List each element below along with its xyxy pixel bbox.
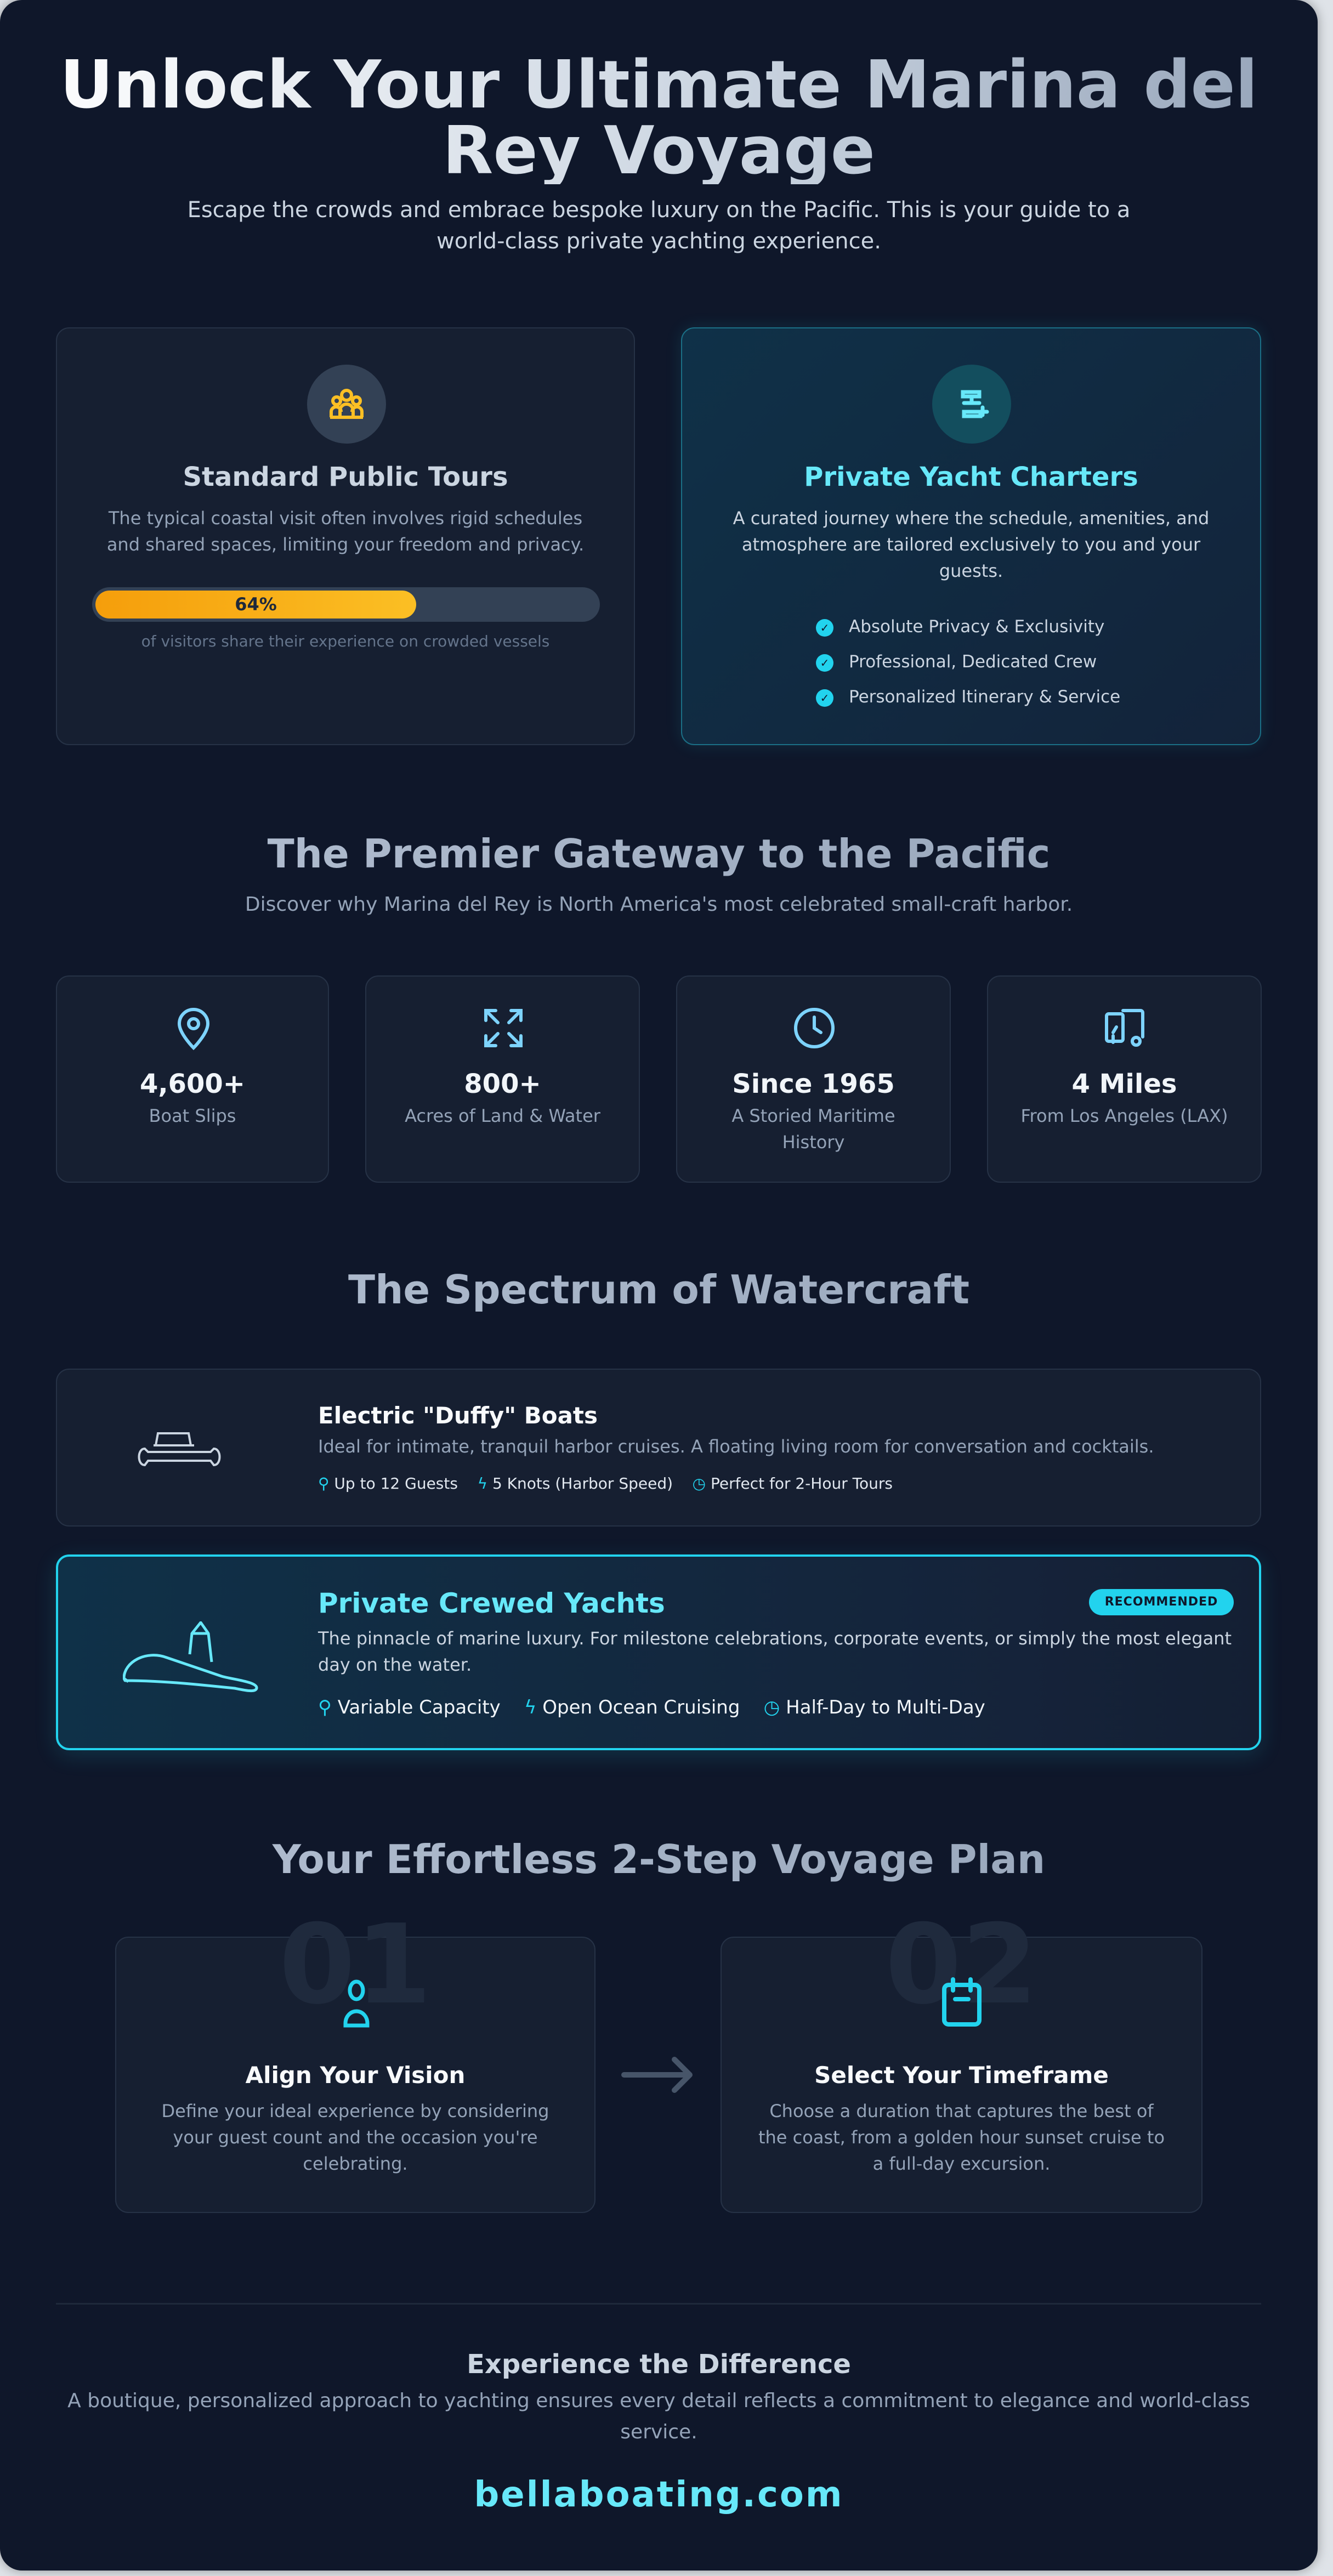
checklist: ✓ xyxy=(820,621,829,634)
title: Private Crewed Yachts xyxy=(318,1587,665,1619)
subheading: Discover why Marina del Rey is North America's most celebrated small-craft harbor. xyxy=(245,893,1073,916)
title: Align Your Vision xyxy=(246,2062,465,2089)
panel: private yacht charters xyxy=(681,327,1261,745)
big number: 01 xyxy=(279,1901,432,2029)
icon: person xyxy=(343,1979,370,2028)
panel: standard public tours xyxy=(56,327,635,745)
checklist: ✓ xyxy=(820,691,829,704)
stat: since 1965: History xyxy=(782,1132,844,1153)
checklist: Absolute Privacy & Exclusivity xyxy=(849,617,1104,637)
text: Choose a duration that captures the best of xyxy=(769,2101,1154,2121)
panel: duffy boats xyxy=(56,1369,1261,1527)
text xyxy=(162,2101,549,2174)
title: Rey Voyage xyxy=(443,113,875,189)
icon: expand xyxy=(484,1009,523,1047)
stat: 4 miles xyxy=(987,975,1262,1183)
text: guests. xyxy=(939,560,1003,581)
stat: since 1965 xyxy=(676,975,951,1183)
icon: yacht xyxy=(932,365,1011,444)
checklist: Professional, Dedicated Crew xyxy=(849,652,1097,672)
text: The typical coastal visit often involves rigid schedules xyxy=(109,508,582,529)
title: Unlock Your Ultimate Marina del xyxy=(60,47,1258,123)
stat: since 1965: A Storied Maritime xyxy=(731,1105,895,1126)
icon: pin xyxy=(178,1008,209,1051)
tags: ⚲ Up to 12 Guests ϟ 5 Knots (Harbor Speed) ◷ Perfect for 2-Hour Tours xyxy=(318,1474,893,1493)
heading: Standard Public Tours xyxy=(183,462,508,492)
icon: route xyxy=(1105,1009,1144,1047)
stat: boat slips xyxy=(56,975,329,1183)
text: celebrating. xyxy=(303,2153,408,2174)
heading: plan xyxy=(0,1835,1318,1884)
website url: bellaboating.com xyxy=(474,2475,844,2515)
text xyxy=(758,2101,1165,2174)
text xyxy=(733,508,1209,581)
stat: acres: Acres of Land & Water xyxy=(405,1105,600,1126)
stat: acres: 800+ xyxy=(464,1069,541,1099)
stat: acres xyxy=(365,975,640,1183)
stat: 4 miles: From Los Angeles (LAX) xyxy=(1020,1105,1228,1126)
icon: group xyxy=(307,365,386,444)
text xyxy=(107,508,584,555)
subtitle: world-class private yachting experience. xyxy=(436,229,881,254)
heading: Private Yacht Charters xyxy=(804,462,1138,492)
checklist: ✓ xyxy=(820,656,829,669)
progress bar 64%: 64% xyxy=(235,594,277,615)
title xyxy=(0,53,1318,184)
title: Select Your Timeframe xyxy=(814,2062,1109,2089)
checklist: Personalized Itinerary & Service xyxy=(849,687,1120,707)
footer text: A boutique, personalized approach to yachting ensures every detail reflects a commitment to elegance and world-class xyxy=(67,2390,1250,2412)
heading: watercraft xyxy=(0,1265,1318,1314)
stat: boat slips: 4,600+ xyxy=(140,1069,245,1099)
text: Define your ideal experience by considering xyxy=(162,2101,549,2121)
icon: duffy boat xyxy=(138,1432,220,1466)
checklist xyxy=(816,617,1120,707)
subtitle: Escape the crowds and embrace bespoke luxury on the Pacific. This is your guide to a xyxy=(188,197,1130,223)
description: Ideal for intimate, tranquil harbor cruises. A floating living room for conversation and cocktails. xyxy=(318,1436,1154,1457)
badge: recommended xyxy=(1089,1589,1234,1615)
stat: 4 miles: 4 Miles xyxy=(1072,1069,1177,1099)
icon: yacht xyxy=(123,1621,258,1692)
title: Electric "Duffy" Boats xyxy=(318,1402,598,1429)
description: The pinnacle of marine luxury. For milestone celebrations, corporate events, or simply the most elegant day on the water. xyxy=(318,1628,1232,1675)
text: your guest count and the occasion you're xyxy=(173,2127,537,2148)
arrow xyxy=(621,2057,693,2093)
footer text: service. xyxy=(620,2421,697,2443)
icon: calendar xyxy=(942,1977,982,2027)
text: and shared spaces, limiting your freedom and privacy. xyxy=(107,534,584,555)
footer text xyxy=(67,2390,1250,2443)
step 1 xyxy=(115,1937,595,2213)
icon: clock xyxy=(794,1008,835,1048)
panel: private crewed yachts xyxy=(56,1554,1261,1750)
heading: plan: Your Effortless 2-Step Voyage Plan xyxy=(273,1836,1045,1882)
tags: ⚲ Variable Capacity ϟ Open Ocean Cruising ◷ Half-Day to Multi-Day xyxy=(318,1696,985,1718)
badge: recommended: RECOMMENDED xyxy=(1105,1595,1218,1609)
heading: gateway xyxy=(0,829,1318,878)
subtitle xyxy=(188,197,1130,254)
footer heading: Experience the Difference xyxy=(467,2349,851,2380)
text: A curated journey where the schedule, amenities, and xyxy=(733,508,1209,529)
text: a full-day excursion. xyxy=(873,2153,1050,2174)
progress bar 64% xyxy=(92,587,600,622)
heading: gateway: The Premier Gateway to the Pacific xyxy=(268,831,1050,877)
caption: of visitors share their experience on crowded vessels xyxy=(141,632,549,650)
text: atmosphere are tailored exclusively to you and your xyxy=(742,534,1200,555)
stat: since 1965: Since 1965 xyxy=(732,1069,895,1099)
big number: 02 xyxy=(885,1901,1038,2029)
text: the coast, from a golden hour sunset cruise to xyxy=(758,2127,1165,2148)
step 2 xyxy=(721,1937,1202,2213)
heading: watercraft: The Spectrum of Watercraft xyxy=(348,1267,969,1313)
stat: boat slips: Boat Slips xyxy=(149,1105,236,1126)
